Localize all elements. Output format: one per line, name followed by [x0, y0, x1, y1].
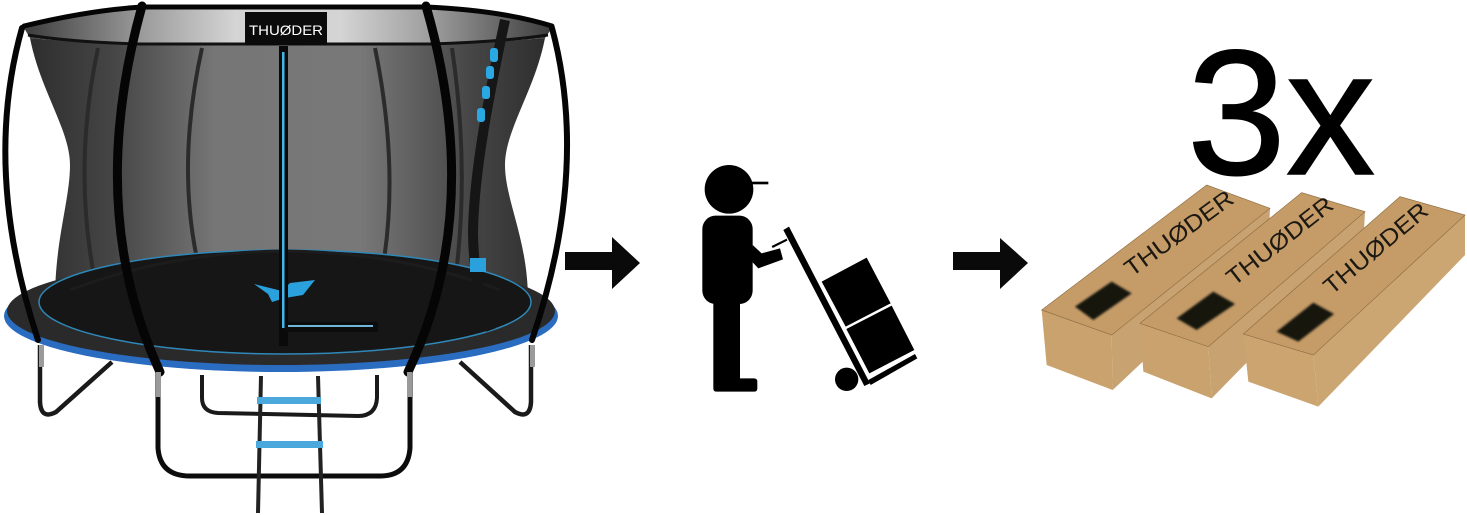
ladder — [256, 376, 323, 513]
quantity 3x: 3x — [1187, 13, 1375, 212]
box 1 — [1042, 185, 1270, 390]
delivery person with trolley — [702, 165, 917, 392]
arrow 1 — [565, 237, 640, 289]
body — [702, 216, 787, 392]
net inner poles — [84, 48, 462, 286]
arrow 2 — [953, 238, 1028, 289]
net body — [30, 38, 545, 300]
rim back line — [28, 35, 548, 44]
box 2 — [1140, 191, 1365, 398]
hand trolley — [783, 227, 917, 391]
net top band — [24, 6, 552, 44]
head and cap — [705, 165, 768, 214]
pole sleeves — [39, 345, 535, 397]
logo banner: THUØDER — [249, 22, 323, 38]
trolley boxes — [822, 258, 914, 373]
box 3: THUØDER — [1318, 197, 1433, 299]
box 3 — [1243, 197, 1465, 407]
trampoline — [4, 6, 567, 513]
back legs — [40, 345, 531, 416]
mat logo — [254, 280, 315, 302]
blue outer rim — [4, 260, 558, 372]
mat top edge — [70, 251, 500, 290]
black pad — [7, 257, 555, 365]
zipper — [279, 46, 378, 346]
box 2: THUØDER — [1221, 191, 1338, 291]
jumping mat — [39, 250, 531, 354]
side strap — [470, 20, 505, 330]
three cardboard boxes — [1042, 185, 1465, 407]
front frame — [158, 372, 410, 476]
logo banner — [245, 12, 327, 45]
box 1: THUØDER — [1119, 185, 1238, 281]
enclosure posts — [5, 6, 567, 372]
